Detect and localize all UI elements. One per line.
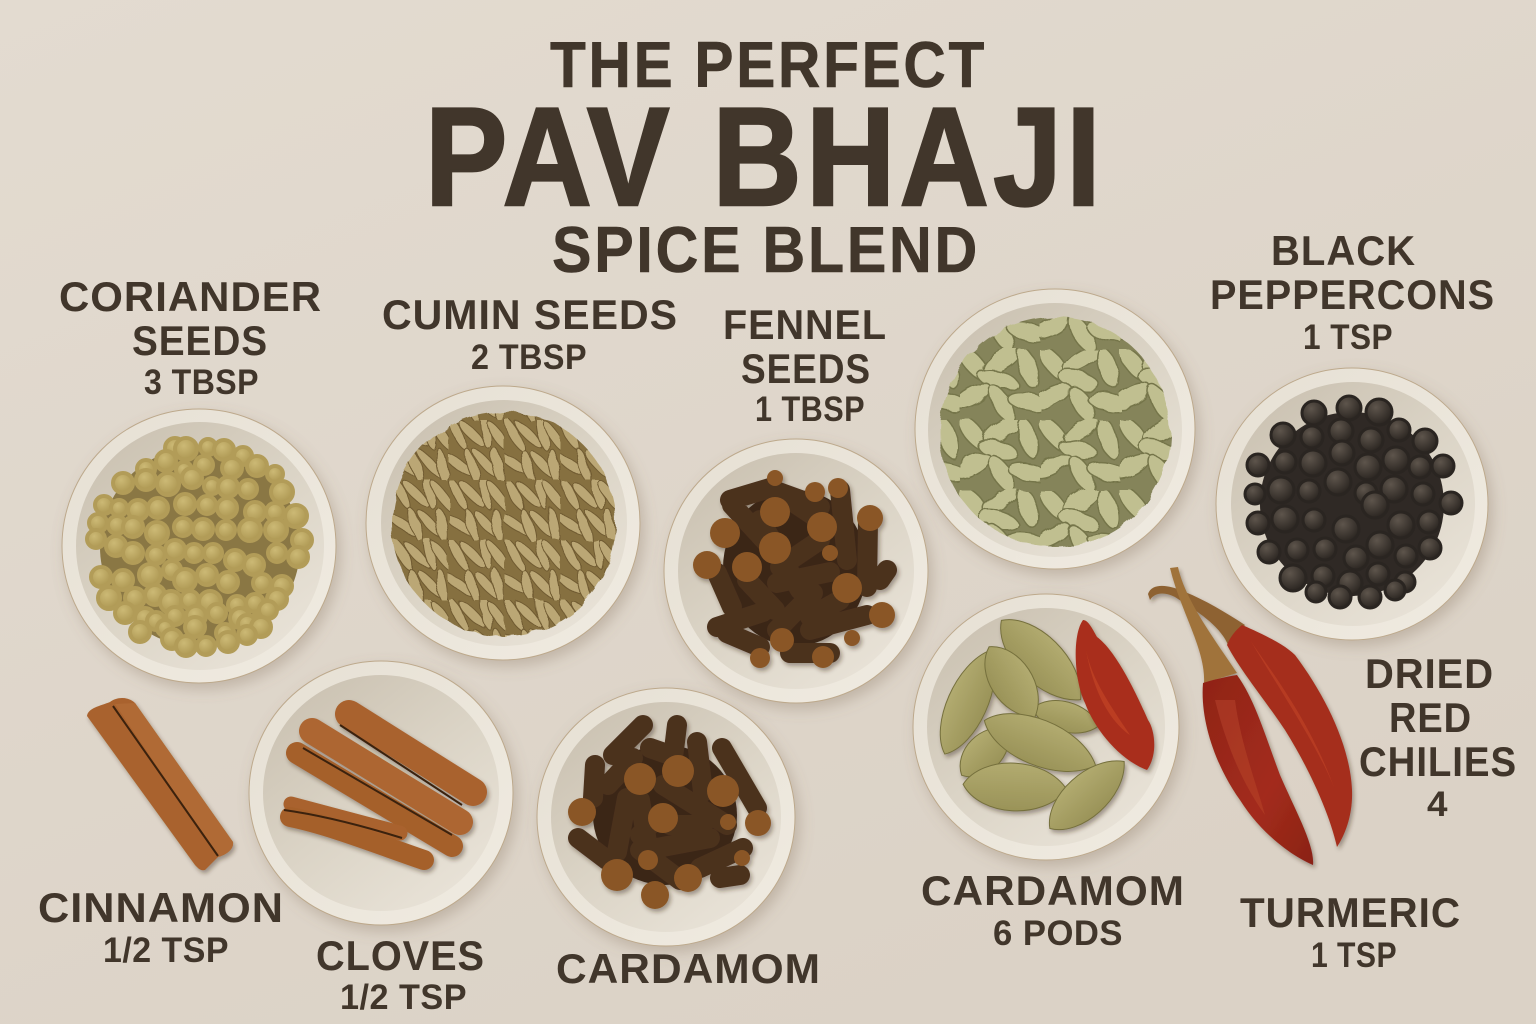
label: black peppercorns bbox=[1210, 227, 1495, 357]
cumin seeds bbox=[392, 412, 616, 636]
label: cloves: 1/2 TSP bbox=[340, 978, 467, 1017]
panel: fennel bowl bbox=[915, 289, 1195, 569]
label: fennel seeds: SEEDS bbox=[741, 345, 871, 392]
title bbox=[425, 28, 1105, 286]
label: cumin seeds bbox=[382, 291, 678, 377]
label: black peppercorns: BLACK bbox=[1271, 227, 1416, 274]
label: black peppercorns: 1 TSP bbox=[1303, 318, 1393, 357]
label: fennel seeds: FENNEL bbox=[723, 301, 887, 348]
cinnamon sticks bbox=[284, 714, 473, 860]
label: turmeric: TURMERIC bbox=[1240, 889, 1461, 936]
label: cumin seeds: CUMIN SEEDS bbox=[382, 291, 678, 338]
panel: cloves bowl upper bbox=[664, 439, 928, 703]
label: fennel seeds bbox=[723, 301, 887, 429]
title: SPICE BLEND bbox=[552, 213, 980, 286]
panel: black peppercorn bowl bbox=[1216, 368, 1488, 640]
label: cardamom 6 pods: 6 PODS bbox=[993, 914, 1123, 953]
label: black peppercorns: PEPPERCONS bbox=[1210, 271, 1495, 318]
label: fennel seeds: 1 TBSP bbox=[755, 390, 865, 429]
label: cloves bbox=[316, 932, 485, 1017]
label: coriander seeds: 3 TBSP bbox=[144, 363, 259, 402]
label: coriander seeds bbox=[59, 273, 322, 402]
title: THE PERFECT bbox=[550, 28, 987, 101]
coriander seeds bbox=[87, 438, 312, 656]
label: dried red chilies: CHILIES bbox=[1359, 738, 1517, 785]
title: PAV BHAJI bbox=[425, 78, 1105, 235]
panel: cinnamon bowl bbox=[249, 661, 513, 925]
icon: dried red chilies bbox=[1148, 567, 1352, 865]
icon: cinnamon stick bbox=[87, 698, 233, 870]
label: cloves: CLOVES bbox=[316, 932, 485, 979]
label: cinnamon: CINNAMON bbox=[38, 884, 284, 931]
label: cinnamon bbox=[38, 884, 284, 970]
panel: cumin bowl bbox=[366, 386, 640, 660]
panel: cardamom and chili bowl bbox=[913, 594, 1179, 860]
label: dried red chilies: DRIED bbox=[1365, 650, 1494, 697]
label: cardamom 6 pods: CARDAMOM bbox=[921, 867, 1185, 914]
cloves bbox=[568, 725, 771, 909]
fennel seeds bbox=[940, 317, 1170, 547]
label: dried red chilies: 4 bbox=[1427, 785, 1448, 824]
label: coriander seeds: CORIANDER bbox=[59, 273, 322, 320]
label: turmeric bbox=[1240, 889, 1461, 975]
panel: cloves bowl lower bbox=[537, 688, 795, 946]
label: dried red chilies: RED bbox=[1389, 694, 1472, 741]
label: coriander seeds: SEEDS bbox=[132, 317, 268, 364]
label: turmeric: 1 TSP bbox=[1311, 936, 1397, 975]
label: cardamom: CARDAMOM bbox=[556, 945, 821, 992]
label: dried red chilies bbox=[1359, 650, 1517, 824]
panel: coriander bowl bbox=[62, 409, 336, 683]
peppercorns bbox=[1245, 396, 1462, 608]
chili in bowl bbox=[1076, 620, 1154, 770]
label: cumin seeds: 2 TBSP bbox=[471, 338, 587, 377]
cloves bbox=[693, 470, 895, 668]
cardamom pods bbox=[927, 604, 1138, 844]
label: cardamom 6 pods bbox=[921, 867, 1185, 953]
label: cinnamon: 1/2 TSP bbox=[103, 931, 229, 970]
